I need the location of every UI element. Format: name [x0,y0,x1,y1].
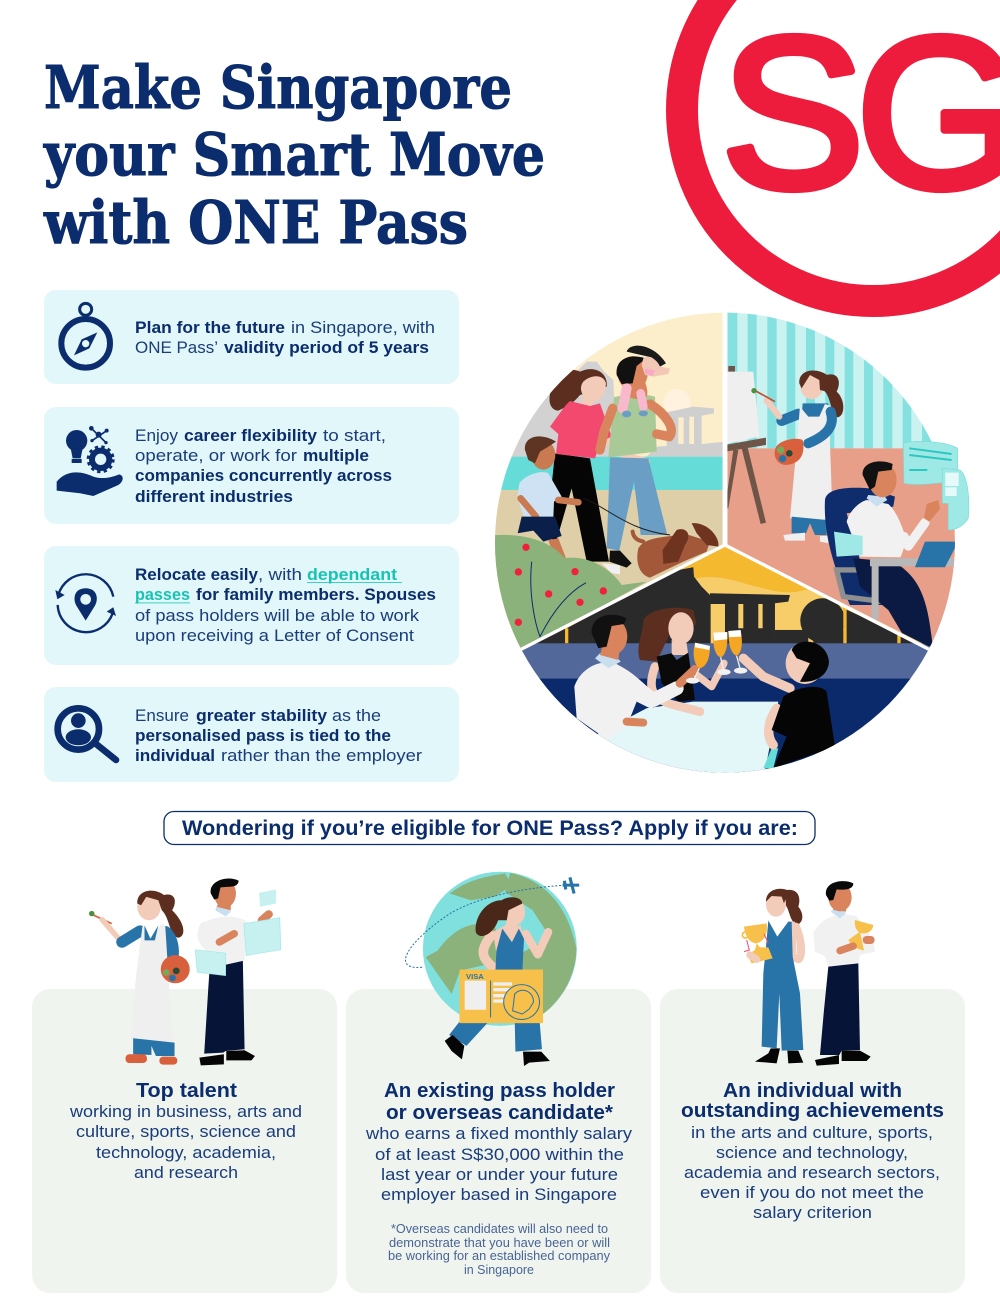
text: plan for the future: Plan for the future [135,318,285,337]
palette [775,439,803,465]
figure: woman with visa card: VISA [466,972,484,981]
globe [423,872,577,1026]
figure: seated man [825,461,958,647]
text: career flexibility: multiple [303,446,369,465]
text: career flexibility: operate, or work for [135,446,297,465]
illustration: lifestyle pie with three scenes [480,300,981,780]
scene: family outing [495,312,723,650]
text: salary criterion: of at least S$30,000 within the [375,1145,624,1164]
heading: outstanding achievements: outstanding achievements [681,1100,944,1122]
heading: existing pass holder [384,1080,615,1124]
text: relocate easily: upon receiving a Letter of Consent [135,626,414,645]
title [43,53,545,257]
text: plan for the future [135,318,435,357]
text: career flexibility: different industries [135,487,293,506]
figure: man in white shirt [813,881,875,1066]
trajectory and plane [406,877,579,967]
footnote: overseas candidates [388,1222,611,1277]
text: relocate easily: for family members. Spouses [196,585,436,604]
text: top talent description: technology, academia, [96,1143,276,1162]
text: plan for the future: validity period of 5 years [224,338,429,357]
callout: eligibility question: Wondering if you’re eligible for ONE Pass? Apply if you are: [182,816,798,840]
icon: location pin with circular arrows [55,574,116,632]
pie dividers [520,544,930,651]
figure: man raising glass [574,615,695,739]
bush with red berries [495,534,646,650]
scene: artist and video-call professional [727,312,970,647]
title: with ONE Pass [43,188,468,257]
panel: outstanding achievements card [660,989,965,1293]
text: achievements description: academia and research sectors, [684,1163,940,1182]
figure: artist [751,370,843,543]
text: achievements description: salary criterion [753,1203,872,1222]
text: greater stability: Ensure [135,706,189,725]
text: greater stability: greater stability [196,706,328,725]
footnote: overseas candidates: be working for an established company [388,1249,611,1263]
text: relocate easily [135,565,436,645]
text: top talent description: culture, sports, science and [76,1122,296,1141]
icon: magnifier with person [58,708,116,760]
figure: woman with visa card [445,897,550,1066]
text: salary criterion: last year or under your future [381,1165,618,1184]
figure: businessman with screens [195,878,281,1065]
text: top talent description: and research [134,1163,238,1182]
panel: relocate easily [44,546,459,665]
text: career flexibility: to start, [323,426,386,445]
figure: woman seen from behind [743,642,835,768]
text: plan for the future: in Singapore, with [291,318,435,337]
champagne glasses [686,630,747,684]
text: salary criterion: employer based in Singapore [381,1185,617,1204]
panel: greater stability [44,687,459,782]
heading: existing pass holder: An existing pass holder [384,1080,615,1102]
scene: dinner toast with skyline [521,547,930,773]
text: greater stability [135,706,422,765]
text: salary criterion [365,1124,633,1204]
text: career flexibility: companies concurrently across [135,466,392,485]
text: plan for the future: ONE Pass’ [135,338,218,357]
figure: boy with leash [517,436,670,559]
text: salary criterion: who earns a fixed monthly salary [365,1124,633,1143]
title: Make Singapore [44,53,512,122]
text: achievements description: science and technology, [716,1143,908,1162]
figure: artist [89,891,190,1065]
footnote: overseas candidates: in Singapore [464,1263,534,1277]
text: top talent description: working in business, arts and [69,1102,302,1121]
figure: woman in pink [546,369,646,574]
illustration: artist and business professional [89,878,281,1065]
text: achievements description [684,1123,940,1222]
heading: outstanding achievements: An individual with [723,1080,902,1102]
footnote: overseas candidates: *Overseas candidates will also need to [391,1222,608,1236]
footnote: overseas candidates: demonstrate that you have been or will [389,1236,610,1250]
heading: existing pass holder: or overseas candidate* [386,1102,613,1124]
text: achievements description: in the arts and culture, sports, [691,1123,933,1142]
table [598,702,778,773]
icon: compass [61,303,110,368]
text: greater stability: individual [135,746,215,765]
figure: woman in black dress [638,608,724,712]
text: career flexibility: career flexibility [184,426,318,445]
text: relocate easily: of pass holders will be able to work [135,606,420,625]
heading: top talent: Top talent [136,1080,237,1102]
panel: pass holder card [346,989,651,1293]
panel: top talent card [32,989,337,1293]
text: relocate easily: dependant [307,565,397,584]
skyline silhouette [513,567,928,647]
illustration: woman with visa and globe [406,872,579,1066]
easel with canvas [725,366,766,524]
icon: hand with bulb, gear and network [57,426,123,496]
text: relocate easily: passes [135,585,190,604]
text: greater stability: personalised pass is tied to the [135,726,391,745]
text: relocate easily: Relocate easily [135,565,259,584]
heading: outstanding achievements [681,1080,944,1122]
title: your Smart Move [43,120,545,189]
text: achievements description: even if you do not meet the [700,1183,924,1202]
callout: eligibility question [164,812,815,844]
text: top talent description [69,1102,302,1182]
text: greater stability: as the [332,706,381,725]
illustration: two achievers with trophies [742,881,875,1066]
figure: woman in blue jumpsuit [742,889,803,1063]
floating screens [903,441,969,530]
panel: career flexibility [44,407,459,524]
text: career flexibility: Enjoy [135,426,178,445]
figure: man carrying child [600,346,671,568]
logo: SG in red ring [682,0,1000,301]
panel: plan for the future [44,290,459,384]
text: greater stability: rather than the employer [221,746,422,765]
text: relocate easily: , with [258,565,302,584]
text: career flexibility [135,426,392,506]
figure: dog [633,523,718,578]
